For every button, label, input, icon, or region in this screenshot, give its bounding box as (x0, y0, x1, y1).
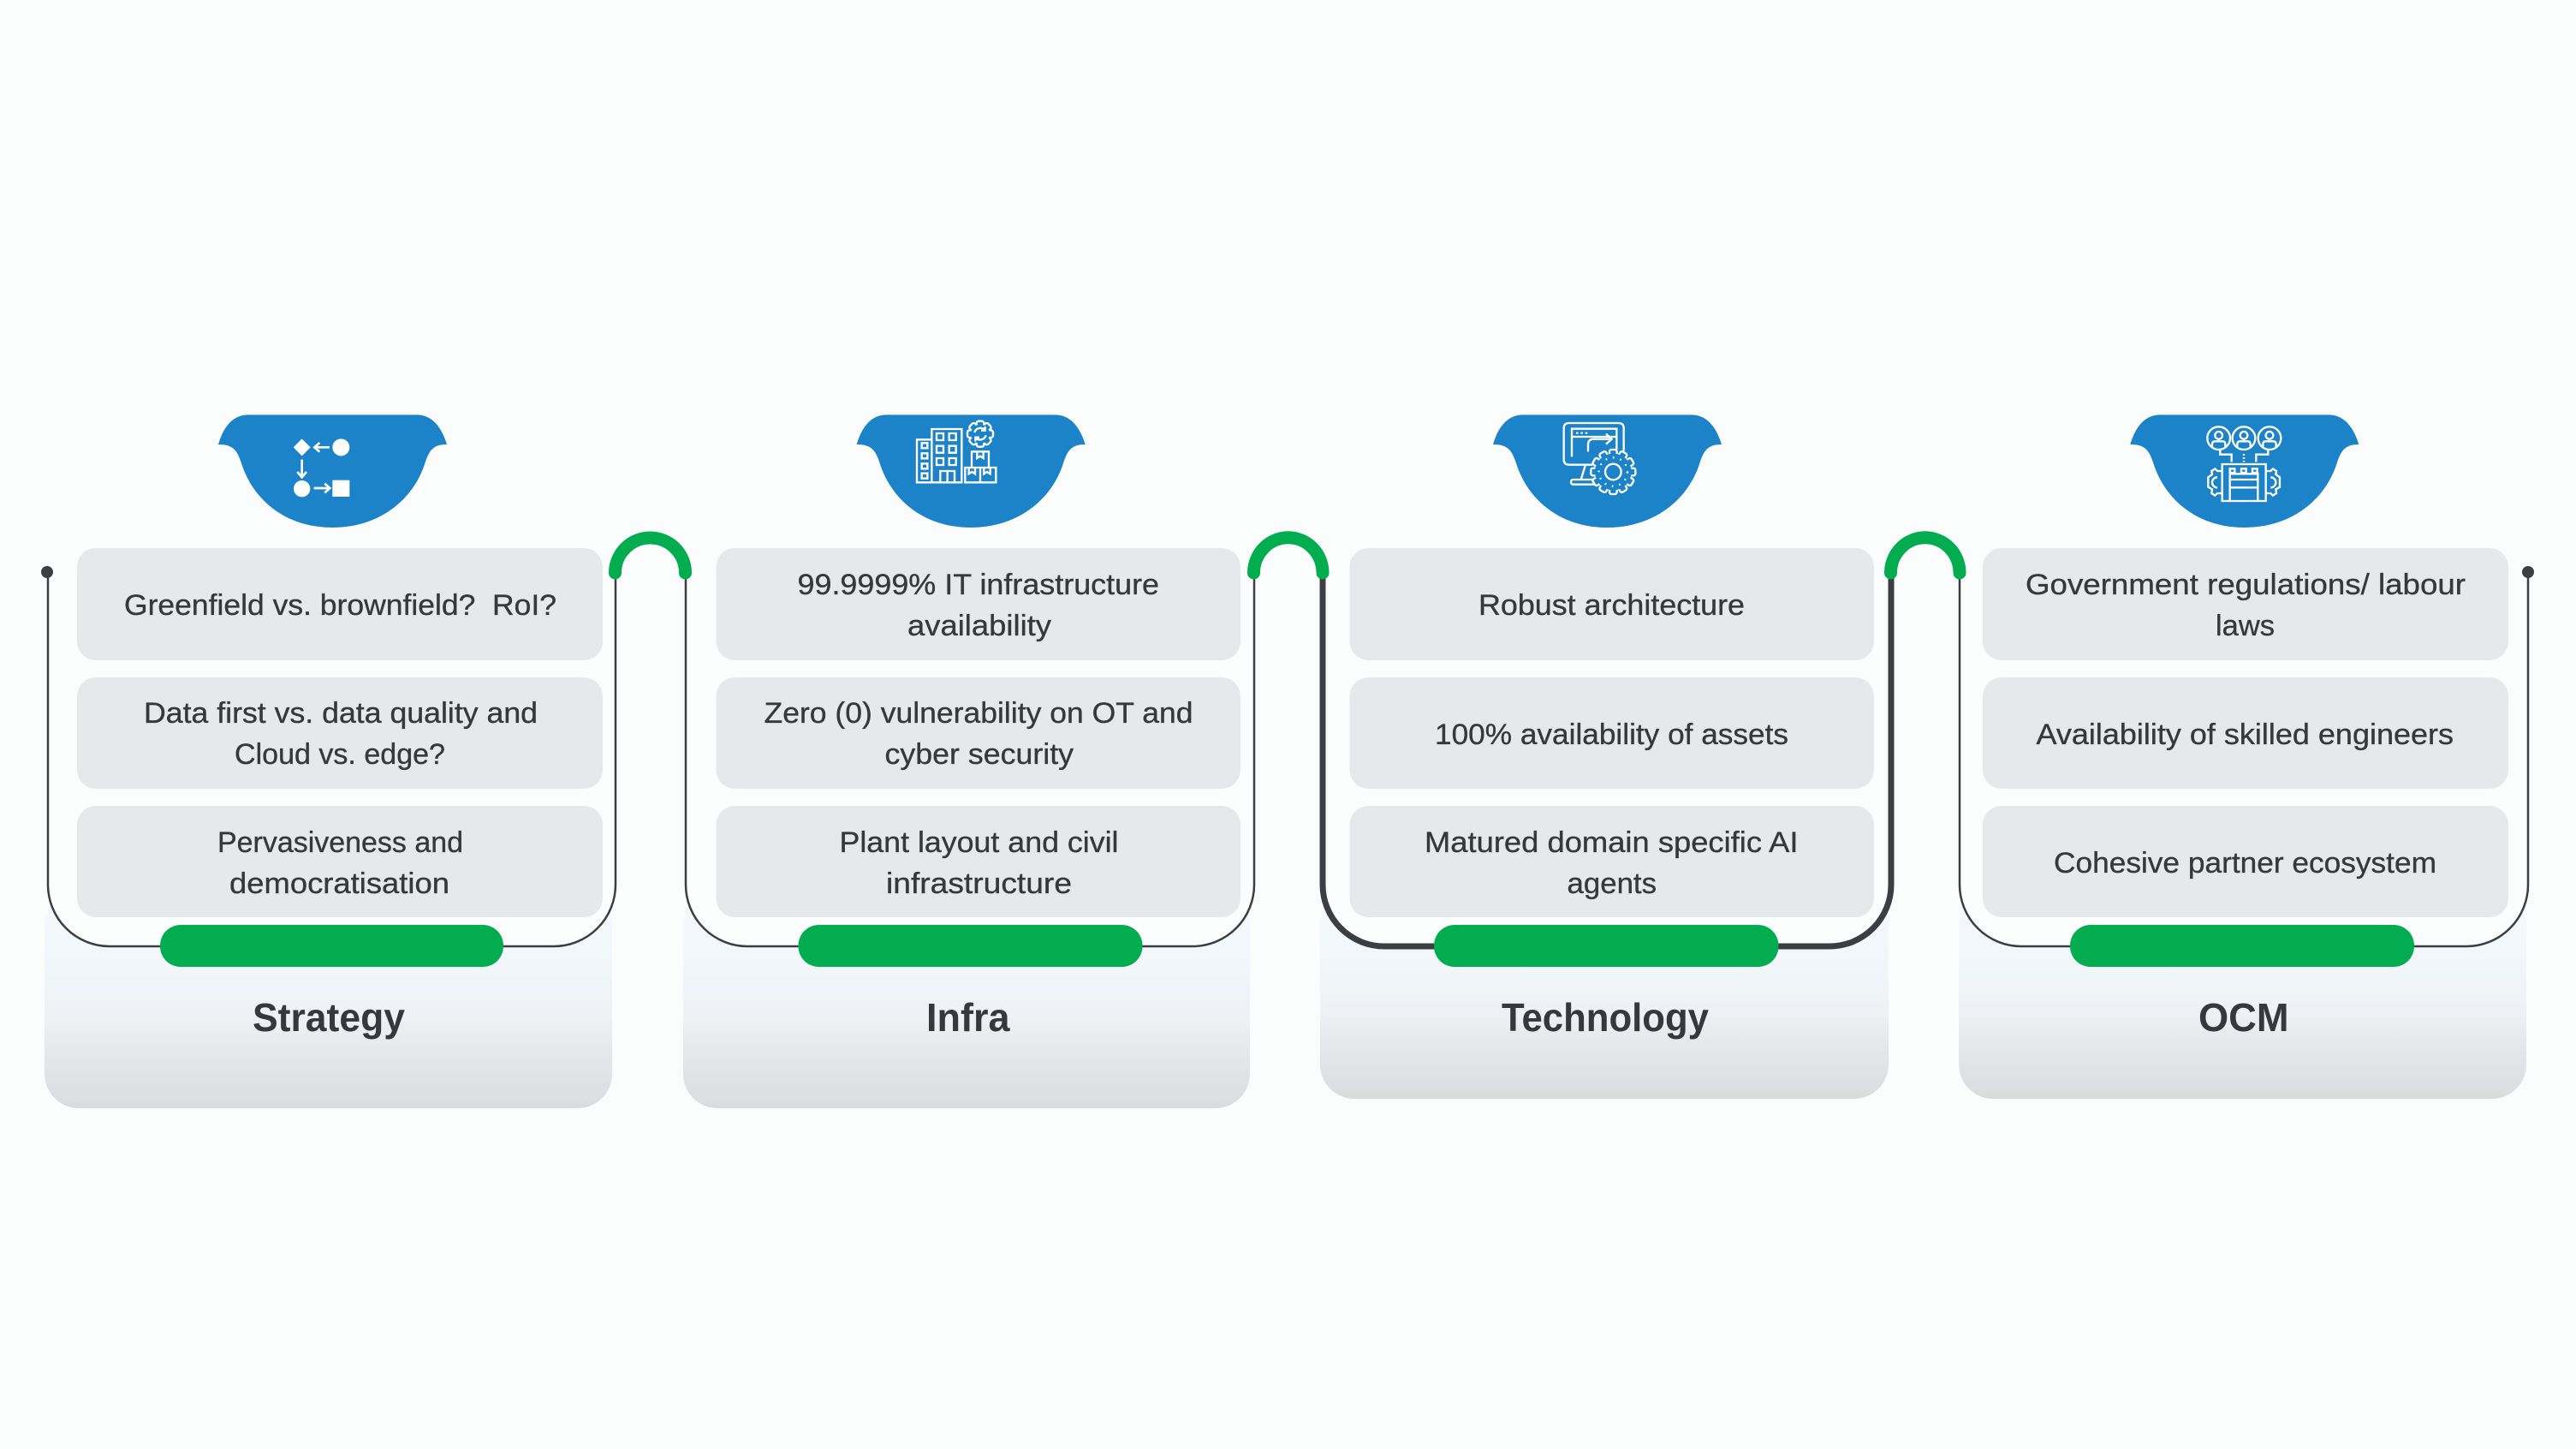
card: AI agents: agents (1567, 868, 1657, 900)
card: asset availability (1349, 677, 1874, 789)
panel: technology label background (1320, 891, 1889, 1099)
column: Strategy (41, 414, 616, 1108)
card: IT availability: 99.9999% IT infrastructure (798, 569, 1159, 601)
card: Zero vulnerability: cyber security (885, 738, 1074, 771)
card: Data first: Data first vs. data quality and (144, 697, 538, 730)
icon: strategy flow diagram (218, 414, 447, 528)
card: skilled engineers: Availability of skilled engineers (2036, 719, 2454, 751)
card: Plant layout: Plant layout and civil (839, 826, 1118, 859)
end dot (2522, 566, 2534, 578)
card: Robust architecture: Robust architecture (1478, 589, 1745, 622)
arrow: green arch Strategy to Infra (615, 538, 685, 573)
column: OCM (1959, 414, 2534, 1099)
card: Zero vulnerability (716, 677, 1240, 789)
card: Plant layout (716, 806, 1240, 917)
card: Plant layout: infrastructure (886, 868, 1072, 900)
card: Robust architecture (1349, 548, 1874, 660)
arrow: green arch Technology to OCM (1890, 538, 1960, 573)
card: IT availability: availability (907, 610, 1051, 642)
icon: monitor with gear (1493, 414, 1722, 528)
start dot (41, 566, 53, 578)
card: Data first (77, 677, 603, 789)
panel: infra label background (683, 891, 1250, 1108)
card: asset availability: 100% availability of assets (1435, 719, 1788, 751)
card: partner ecosystem (1983, 806, 2508, 917)
card: regulations: Government regulations/ labour (2026, 569, 2466, 601)
arrow: green arch Infra to Technology (1253, 538, 1323, 573)
green pill (160, 925, 503, 967)
card: AI agents (1349, 806, 1874, 917)
card: partner ecosystem: Cohesive partner ecosystem (2054, 847, 2436, 880)
heading: Strategy: Strategy (253, 995, 405, 1040)
heading: OCM: OCM (2198, 995, 2289, 1040)
heading: Infra: Infra (926, 995, 1010, 1040)
card: IT availability (716, 548, 1240, 660)
column: Technology (1320, 414, 1891, 1099)
panel: strategy label background (45, 891, 612, 1108)
card: Pervasiveness (77, 806, 603, 917)
green pill (1434, 925, 1779, 967)
green pill (2070, 925, 2414, 967)
card: regulations: laws (2216, 610, 2275, 642)
icon: people and machine (2130, 414, 2359, 528)
card: skilled engineers (1983, 677, 2508, 789)
card: Pervasiveness: Pervasiveness and (217, 826, 463, 859)
connector line: strategy frame (48, 572, 616, 946)
card: Greenfield: Greenfield vs. brownfield? RoI? (124, 589, 556, 622)
card: regulations (1983, 548, 2508, 660)
column: Infra (683, 414, 1254, 1108)
connector line: technology frame (emphasised) (1323, 573, 1891, 946)
green pill (798, 925, 1142, 967)
card: Zero vulnerability: Zero (0) vulnerability on OT and (764, 697, 1193, 730)
card: Data first: Cloud vs. edge? (235, 738, 445, 771)
heading: Technology: Technology (1502, 995, 1709, 1040)
connector line: OCM frame (1960, 572, 2528, 946)
card: Greenfield (77, 548, 603, 660)
connector line: infra frame (686, 573, 1254, 946)
icon: factory buildings and boxes (857, 414, 1086, 528)
card: AI agents: Matured domain specific AI (1425, 826, 1798, 859)
card: Pervasiveness: democratisation (229, 868, 449, 900)
panel: OCM label background (1959, 891, 2526, 1099)
